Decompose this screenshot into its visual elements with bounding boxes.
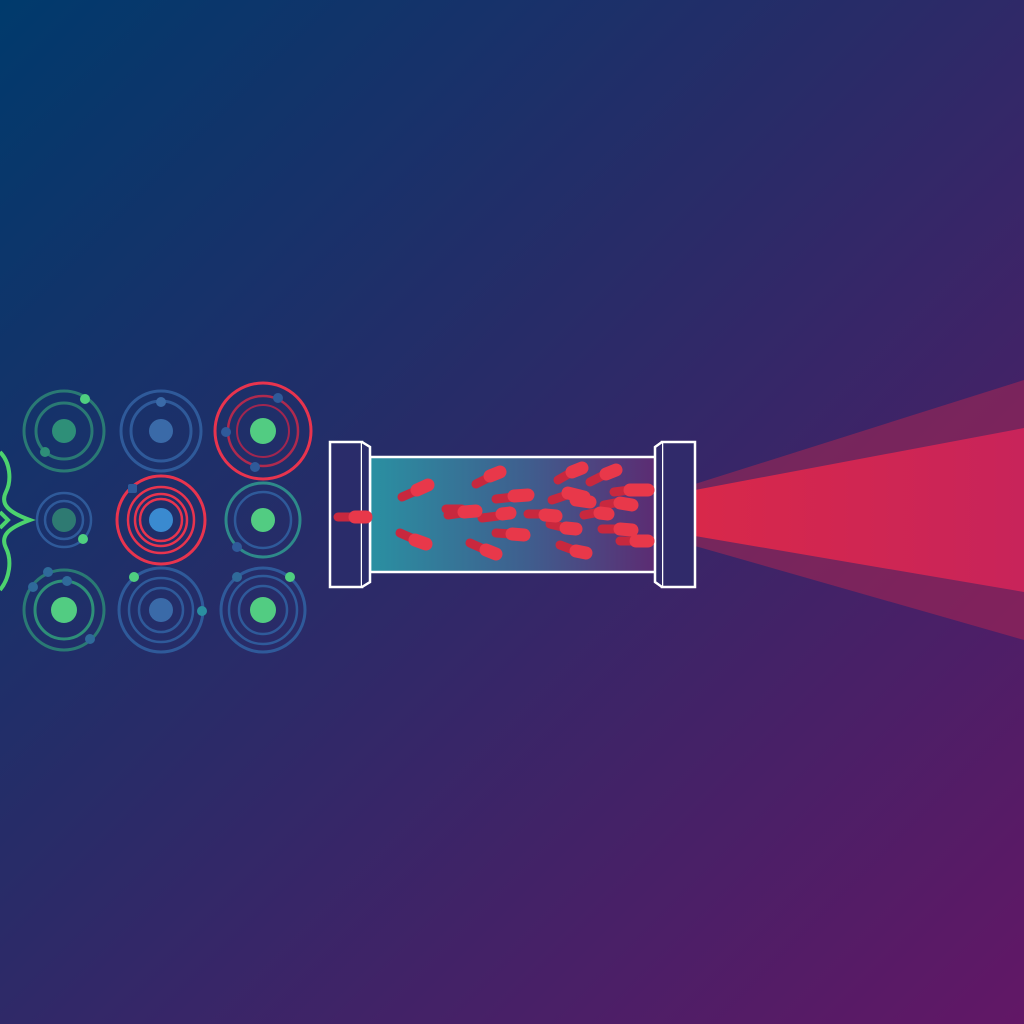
atom r1c2 xyxy=(121,391,201,471)
photons xyxy=(338,468,648,554)
laser tube xyxy=(330,442,695,587)
atom r1c3 xyxy=(215,383,311,479)
icon: green wave xyxy=(0,452,30,590)
left cap xyxy=(330,442,370,587)
atom r2c3 xyxy=(226,483,300,557)
atom r2c2 xyxy=(117,476,205,564)
atom grid xyxy=(24,383,311,652)
atom r3c3 xyxy=(221,568,305,652)
atom r3c1 xyxy=(24,567,104,650)
right cap xyxy=(655,442,695,587)
laser beam xyxy=(695,380,1024,640)
atom r3c2 xyxy=(119,568,207,652)
atom r1c1 xyxy=(24,391,104,471)
atom r2c1 xyxy=(37,493,91,547)
glass tube xyxy=(370,457,656,572)
